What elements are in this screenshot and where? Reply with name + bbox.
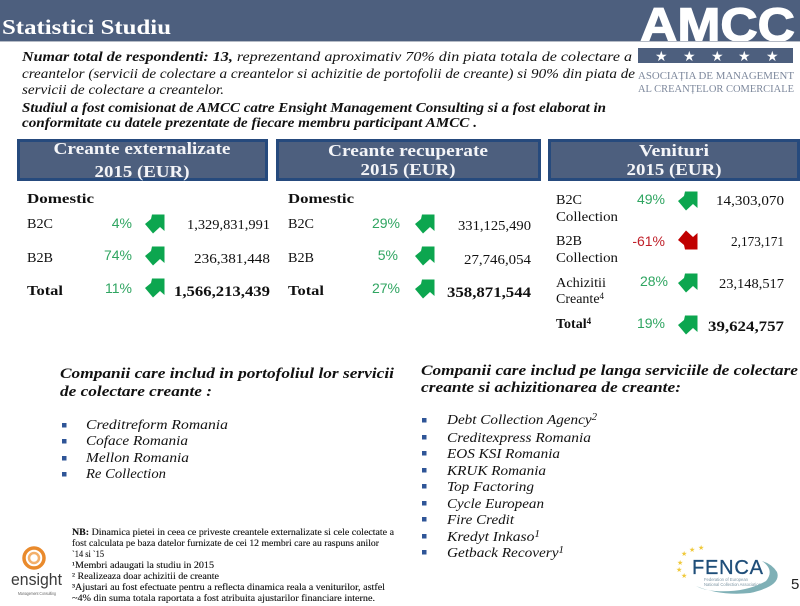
logo: FENCA: ★ bbox=[677, 559, 683, 567]
panel heading: creante externalizate bbox=[18, 139, 266, 181]
table: creante externalizate: B2C bbox=[27, 217, 53, 232]
company list: collection and acquisition: 2 bbox=[592, 412, 597, 423]
panel heading: creante externalizate: Creante externalizate bbox=[54, 139, 230, 158]
table: creante recuperate: 27,746,054 bbox=[464, 252, 531, 267]
table: creante externalizate: 1,566,213,439 bbox=[174, 284, 270, 300]
company list: collection and acquisition: Kredyt Inkaso bbox=[447, 530, 525, 545]
panel heading: venituri bbox=[550, 140, 798, 180]
footnotes: ¹Membri adaugati la studiu in 2015 bbox=[72, 560, 214, 570]
logo: FENCA: FENCA bbox=[692, 557, 764, 579]
logo: FENCA: ★ bbox=[681, 572, 687, 580]
panel heading: creante recuperate: Creante recuperate bbox=[328, 141, 488, 160]
company list: collection and acquisition: KRUK Romania bbox=[446, 464, 546, 479]
footnotes bbox=[72, 527, 394, 603]
panel heading: venituri: 2015 (EUR) bbox=[626, 160, 722, 179]
table: creante externalizate: 74% bbox=[104, 247, 132, 263]
logo: ensight: Management Consulting bbox=[18, 591, 56, 596]
logo: AMCC: ★ bbox=[738, 49, 751, 65]
title: Statistici Studiu bbox=[2, 15, 171, 39]
logo: AMCC: ★ bbox=[766, 49, 779, 65]
footnotes: NB: Dinamica pietei in ceea ce priveste creantele externalizate si cele colectate a bbox=[72, 527, 394, 537]
company list: collection and acquisition: Top Factoring bbox=[447, 480, 534, 495]
intro text bbox=[21, 50, 635, 130]
footnotes: `14 si `15 bbox=[72, 549, 104, 559]
table: venituri: 4 bbox=[600, 291, 605, 301]
company list: collection services: Creditreform Romania bbox=[86, 418, 228, 433]
intro text: conformitate cu datele prezentate de fiecare membru participant AMCC . bbox=[22, 115, 477, 130]
table: venituri: 4 bbox=[587, 316, 592, 326]
table: creante externalizate bbox=[27, 192, 270, 300]
intro text: Studiul a fost comisionat de AMCC catre Ensight Management Consulting si a fost elaborat in bbox=[22, 100, 606, 115]
table: venituri bbox=[556, 191, 784, 335]
table: creante recuperate: 29% bbox=[372, 215, 400, 231]
table: venituri: 39,624,757 bbox=[708, 319, 784, 335]
logo: AMCC: ★ bbox=[711, 49, 724, 65]
company list: collection services: Re Collection bbox=[85, 467, 166, 482]
intro text: servicii de colectare a creantelor. bbox=[22, 83, 224, 98]
table: creante externalizate: Total bbox=[27, 284, 63, 299]
company list: collection and acquisition: Fire Credit bbox=[446, 513, 515, 528]
table: creante recuperate bbox=[288, 192, 531, 301]
company list: collection services: de colectare creante : bbox=[60, 384, 212, 400]
table: creante recuperate: 5% bbox=[378, 247, 398, 263]
table: creante recuperate: 358,871,544 bbox=[447, 285, 531, 301]
table: venituri: Collection bbox=[556, 251, 618, 266]
footnotes: ² Realizeaza doar achizitii de creante bbox=[72, 571, 219, 581]
company list: collection and acquisition bbox=[421, 363, 798, 561]
logo: AMCC: ASOCIAȚIA DE MANAGEMENT bbox=[638, 70, 794, 82]
logo: AMCC: AL CREANȚELOR COMERCIALE bbox=[638, 83, 794, 95]
logo: FENCA: ★ bbox=[676, 566, 682, 574]
table: venituri: 28% bbox=[640, 273, 668, 289]
table: creante recuperate: 331,125,490 bbox=[458, 218, 531, 233]
logo: FENCA: Federation of European bbox=[704, 577, 748, 582]
table: creante externalizate: 236,381,448 bbox=[194, 251, 270, 266]
table: venituri: Creante bbox=[556, 292, 600, 307]
panel heading: creante externalizate: 2015 (EUR) bbox=[94, 162, 190, 181]
company list: collection and acquisition: Getback Recovery bbox=[447, 546, 549, 561]
table: creante externalizate: Domestic bbox=[27, 192, 94, 207]
intro text: creantelor (servicii de colectare a creantelor si achizitie de portofolii de creante) si 90% din piata de bbox=[22, 67, 635, 82]
company list: collection and acquisition: creante si achizitionarea de creante: bbox=[421, 380, 681, 396]
company list: collection and acquisition: Creditexpress Romania bbox=[447, 431, 591, 446]
table: creante recuperate: Domestic bbox=[288, 192, 354, 207]
table: creante recuperate: Total bbox=[288, 284, 324, 299]
company list: collection services bbox=[60, 366, 395, 482]
table: venituri: 19% bbox=[637, 315, 665, 331]
intro text: Numar total de respondenti: 13, reprezentand aproximativ 70% din piata totala de colectare a bbox=[21, 50, 632, 65]
page number: 5 bbox=[791, 576, 799, 593]
panel heading: creante recuperate bbox=[278, 140, 540, 180]
table: venituri: -61% bbox=[632, 233, 665, 249]
company list: collection services: Companii care includ in portofoliul lor servicii bbox=[60, 366, 395, 382]
company list: collection and acquisition: EOS KSI Romania bbox=[446, 447, 560, 462]
company list: collection and acquisition: Companii care includ pe langa serviciile de colectare bbox=[421, 363, 798, 379]
company list: collection and acquisition: 1 bbox=[559, 545, 564, 556]
company list: collection and acquisition: Cycle European bbox=[447, 497, 544, 512]
table: venituri: 23,148,517 bbox=[719, 276, 784, 291]
panel heading: venituri: Venituri bbox=[639, 141, 709, 160]
logo: ensight bbox=[11, 548, 62, 596]
logo: FENCA: National Collection Associations bbox=[704, 582, 764, 587]
footnotes: fost calculata pe baza datelor furnizate de cei 12 membri care au raspuns anilor bbox=[72, 538, 379, 548]
logo: AMCC bbox=[638, 0, 795, 95]
logo: AMCC: ★ bbox=[655, 49, 668, 65]
table: creante externalizate: B2B bbox=[27, 251, 53, 266]
panel heading: creante recuperate: 2015 (EUR) bbox=[360, 160, 456, 179]
logo: FENCA: ★ bbox=[681, 550, 687, 558]
table: venituri: Achizitii bbox=[556, 276, 606, 291]
company list: collection and acquisition: 1 bbox=[534, 529, 540, 540]
table: venituri: B2C bbox=[556, 193, 582, 208]
table: creante externalizate: 1,329,831,991 bbox=[187, 217, 270, 232]
table: creante externalizate: 11% bbox=[105, 280, 132, 296]
table: venituri: Collection bbox=[556, 210, 618, 225]
company list: collection services: Coface Romania bbox=[86, 434, 188, 449]
table: creante recuperate: 27% bbox=[372, 280, 400, 296]
table: venituri: 14,303,070 bbox=[716, 193, 784, 208]
footnotes: ³Ajustari au fost efectuate pentru a reflecta dinamica reala a veniturilor, astfel bbox=[72, 582, 385, 592]
logo: ensight: ensight bbox=[11, 570, 62, 589]
table: venituri: 2,173,171 bbox=[731, 234, 784, 249]
logo: FENCA: ★ bbox=[698, 544, 704, 552]
company list: collection and acquisition: Debt Collection Agency bbox=[447, 413, 580, 428]
table: creante recuperate: B2B bbox=[288, 251, 314, 266]
table: venituri: 49% bbox=[637, 191, 665, 207]
table: creante externalizate: 4% bbox=[112, 215, 132, 231]
company list: collection services: Mellon Romania bbox=[85, 451, 189, 466]
logo: AMCC: ★ bbox=[683, 49, 696, 65]
footnotes: ~4% din suma totala raportata a fost atribuita ajustarilor financiare interne. bbox=[72, 593, 375, 603]
table: creante recuperate: B2C bbox=[288, 217, 314, 232]
table: venituri: B2B bbox=[556, 234, 582, 249]
logo: FENCA: ★ bbox=[689, 546, 695, 554]
logo: FENCA bbox=[676, 544, 778, 594]
table: venituri: Total bbox=[556, 317, 587, 332]
header band bbox=[0, 0, 800, 42]
